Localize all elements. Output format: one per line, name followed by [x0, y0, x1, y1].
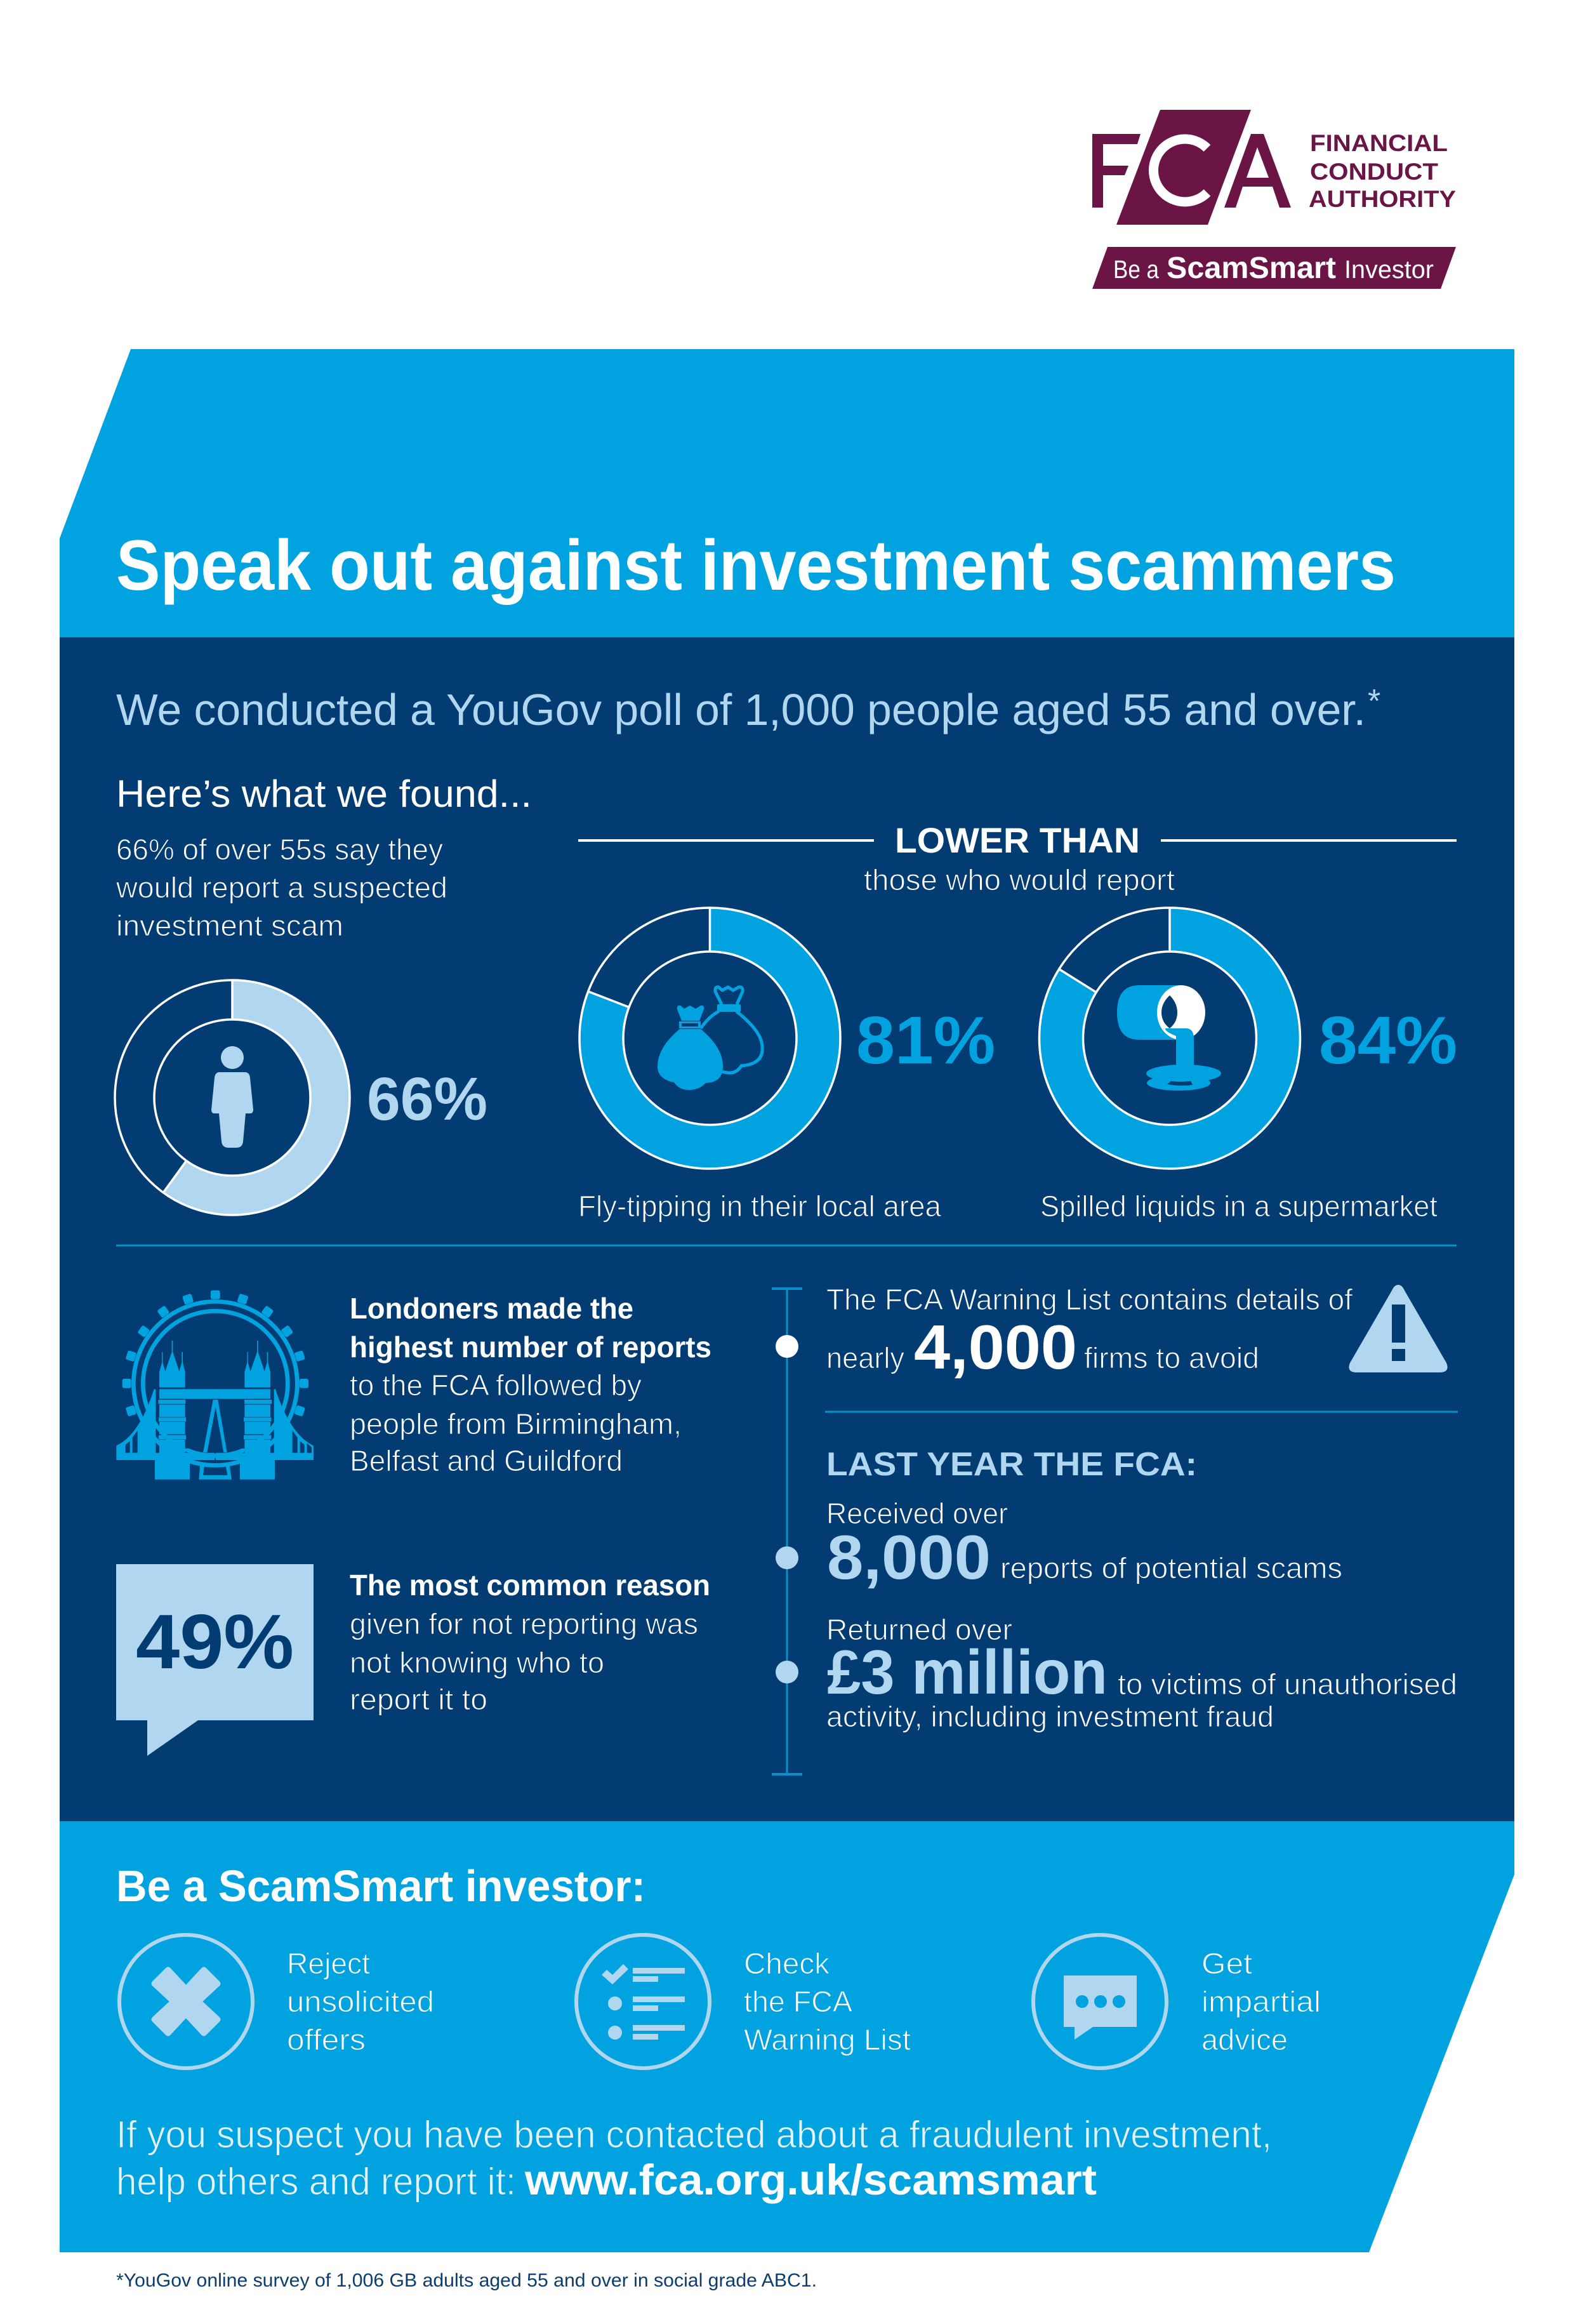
text: common reason: not knowing who to — [350, 1646, 604, 1679]
text: warning list: The FCA Warning List contains details of — [826, 1283, 1352, 1316]
panel: header — [60, 349, 1514, 639]
call to action — [116, 2113, 1272, 2204]
icon: checklist — [576, 1935, 710, 2068]
stat: 3 million returned: to victims of unauthorised — [1118, 1668, 1457, 1701]
footnote: *YouGov online survey of 1,006 GB adults aged 55 and over in social grade ABC1. — [116, 2270, 817, 2291]
label: fly-tipping: Fly-tipping in their local area — [578, 1190, 941, 1223]
call to action: help others and report it: — [116, 2160, 516, 2203]
call to action: www.fca.org.uk/scamsmart — [524, 2156, 1097, 2204]
stat: 81%: 81% — [856, 1003, 995, 1078]
stat: 8,000 reports: 8,000 — [827, 1522, 991, 1592]
title: Speak out against investment scammers — [116, 526, 1396, 605]
text: warning list: 4,000 — [914, 1312, 1077, 1382]
call to action: If you suspect you have been contacted about a fraudulent investment, — [116, 2113, 1272, 2156]
text: check: Check — [744, 1947, 830, 1980]
donut: 84 percent — [1039, 908, 1300, 1169]
text: Londoners: Londoners made the — [350, 1292, 633, 1325]
text: Londoners — [350, 1292, 711, 1477]
logo banner: Be a — [1113, 256, 1160, 284]
label: spilled liquids: Spilled liquids in a supermarket — [1040, 1190, 1438, 1223]
text: 66 percent statement — [116, 833, 447, 942]
logo banner: ScamSmart — [1167, 251, 1336, 285]
donut: 81 percent — [579, 908, 840, 1169]
text: 66 percent statement: investment scam — [116, 909, 343, 942]
heading: lower than: those who would report — [864, 863, 1175, 896]
panel: findings — [60, 637, 1514, 1821]
logo: FCA — [1092, 110, 1456, 289]
text: Londoners: Belfast and Guildford — [350, 1444, 623, 1477]
text: warning list — [826, 1283, 1352, 1382]
logo wordmark: FINANCIAL — [1310, 130, 1448, 156]
text: get advice: advice — [1201, 2023, 1288, 2056]
icon: speech bubble — [1033, 1935, 1167, 2068]
icon: London skyline — [116, 1291, 314, 1480]
text: 66 percent statement: 66% of over 55s say they — [116, 833, 443, 866]
stat: 8,000 reports — [826, 1497, 1342, 1592]
icon: spilled paint — [1117, 985, 1221, 1091]
icon: rubbish bags — [658, 987, 762, 1090]
panel: advice — [60, 1821, 1514, 2252]
stat: 84%: 84% — [1319, 1003, 1457, 1078]
logo banner: Investor — [1344, 256, 1434, 284]
timeline — [772, 1289, 802, 1774]
stat: 8,000 reports: Received over — [826, 1497, 1008, 1530]
text: common reason: report it to — [350, 1683, 487, 1716]
stat: 66%: 66% — [367, 1065, 487, 1133]
heading: last year: LAST YEAR THE FCA: — [826, 1446, 1197, 1483]
heading: lower than: LOWER THAN — [895, 820, 1140, 860]
text: check: the FCA — [744, 1985, 852, 2018]
text: check — [744, 1947, 911, 2056]
logo letter A — [1224, 134, 1291, 208]
logo letter F — [1092, 134, 1141, 208]
text: reject: unsolicited — [287, 1985, 434, 2018]
text: common reason: The most common reason — [350, 1569, 710, 1602]
heading: lower than — [578, 820, 1457, 896]
icon: person — [211, 1046, 253, 1148]
subheading: Here’s what we found... — [116, 773, 532, 815]
text: Londoners: people from Birmingham, — [350, 1407, 682, 1440]
text: Londoners: to the FCA followed by — [350, 1369, 642, 1402]
intro text: * — [1368, 683, 1380, 720]
intro text: We conducted a YouGov poll of 1,000 people aged 55 and over. — [116, 685, 1366, 734]
text: reject: offers — [287, 2023, 366, 2056]
advice heading: Be a ScamSmart investor: — [116, 1861, 645, 1911]
stat: 3 million returned — [826, 1613, 1457, 1733]
text: get advice: impartial — [1201, 1985, 1321, 2018]
logo wordmark — [1309, 130, 1456, 212]
text: reject — [287, 1947, 434, 2056]
logo parallelogram with C — [1116, 110, 1251, 225]
text: check: Warning List — [744, 2023, 911, 2056]
logo wordmark: CONDUCT — [1310, 159, 1438, 185]
text: 66 percent statement: would report a suspected — [116, 871, 447, 904]
stat: 8,000 reports: reports of potential scams — [1000, 1551, 1342, 1584]
text: Londoners: highest number of reports — [350, 1331, 711, 1364]
donut: 66 percent — [115, 980, 350, 1215]
text: common reason: given for not reporting was — [350, 1607, 698, 1640]
callout: 49%: 49% — [136, 1598, 294, 1685]
icon: warning triangle — [1349, 1285, 1448, 1372]
stat: 3 million returned: Returned over — [826, 1613, 1012, 1646]
icon: reject cross — [119, 1935, 253, 2068]
text: reject: Reject — [287, 1947, 370, 1980]
text: get advice: Get — [1201, 1947, 1252, 1980]
text: common reason — [350, 1569, 710, 1716]
text: warning list: firms to avoid — [1084, 1341, 1259, 1374]
stat: 3 million returned: £3 million — [827, 1637, 1108, 1707]
logo wordmark: AUTHORITY — [1309, 186, 1456, 212]
stat: 3 million returned: activity, including investment fraud — [826, 1700, 1274, 1733]
callout: 49% — [116, 1564, 314, 1756]
text: warning list: nearly — [826, 1341, 904, 1374]
text: get advice — [1201, 1947, 1321, 2056]
logo banner — [1092, 247, 1456, 289]
